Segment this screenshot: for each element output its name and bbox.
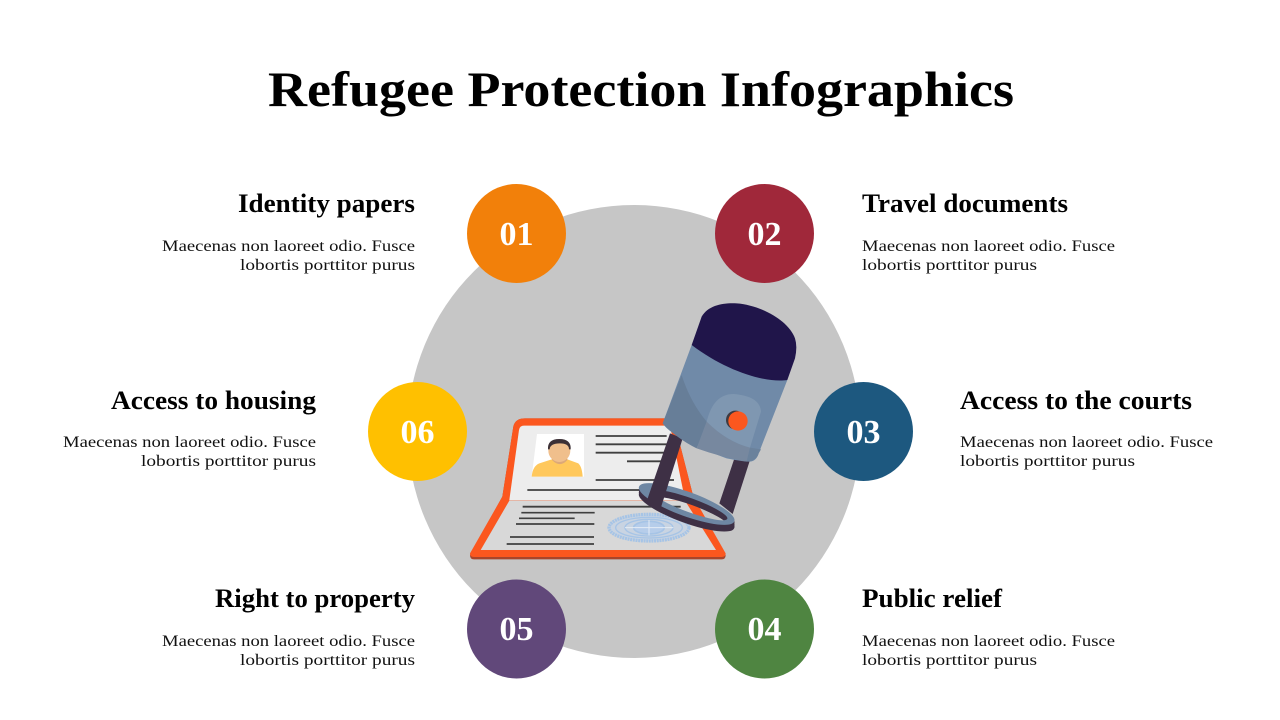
illustration: passport and stamp [470, 303, 796, 559]
description: Maecenas non laoreet odio. Fusce [862, 633, 1115, 650]
heading: travel documents: Travel documents [862, 189, 1068, 218]
left stamp leg [647, 433, 683, 508]
description: lobortis porttitor purus [862, 257, 1037, 274]
badge 04: 04 [748, 611, 782, 648]
step 06 [63, 382, 467, 481]
title: Refugee Protection Infographics [268, 61, 1014, 117]
badge 04 [715, 580, 814, 678]
description: lobortis porttitor purus [141, 453, 316, 470]
badge 03: 03 [846, 414, 880, 451]
heading: access to the courts: Access to the courts [960, 386, 1192, 415]
description: lobortis porttitor purus [862, 652, 1037, 669]
stamp [639, 303, 796, 532]
description: Maecenas non laoreet odio. Fusce [63, 434, 316, 451]
badge 01: 01 [500, 216, 534, 253]
badge 05: 05 [500, 611, 534, 648]
description [63, 434, 316, 470]
badge 01 [467, 184, 566, 283]
badge 02: 02 [748, 216, 782, 253]
badge 06: 06 [400, 414, 434, 451]
description: lobortis porttitor purus [240, 257, 415, 274]
description: Maecenas non laoreet odio. Fusce [162, 633, 415, 650]
step 01 [162, 184, 566, 283]
right stamp leg [719, 457, 750, 514]
heading: right to property: Right to property [215, 584, 415, 613]
description: Maecenas non laoreet odio. Fusce [162, 238, 415, 255]
stamp button [726, 411, 745, 429]
description [162, 238, 415, 274]
badge 03 [814, 382, 913, 481]
stamp body [663, 345, 787, 462]
badge 05 [467, 580, 566, 678]
step 04 [715, 580, 1115, 678]
step 02 [715, 184, 1115, 283]
badge 06 [368, 382, 467, 481]
central grey circle [408, 205, 860, 658]
description [960, 434, 1213, 470]
heading: identity papers: Identity papers [238, 189, 415, 218]
stamp cap [692, 303, 796, 381]
photo [532, 434, 584, 477]
description [162, 633, 415, 669]
passport [470, 418, 726, 559]
description: lobortis porttitor purus [960, 453, 1135, 470]
step 05 [162, 580, 566, 678]
text lines [507, 436, 681, 544]
step 03 [814, 382, 1213, 481]
description: lobortis porttitor purus [240, 652, 415, 669]
description: Maecenas non laoreet odio. Fusce [862, 238, 1115, 255]
heading: public relief: Public relief [862, 584, 1002, 613]
description [862, 238, 1115, 274]
badge 02 [715, 184, 814, 283]
description [862, 633, 1115, 669]
ring [639, 483, 735, 532]
description: Maecenas non laoreet odio. Fusce [960, 434, 1213, 451]
official seal [609, 514, 689, 541]
heading: access to housing: Access to housing [111, 386, 316, 415]
